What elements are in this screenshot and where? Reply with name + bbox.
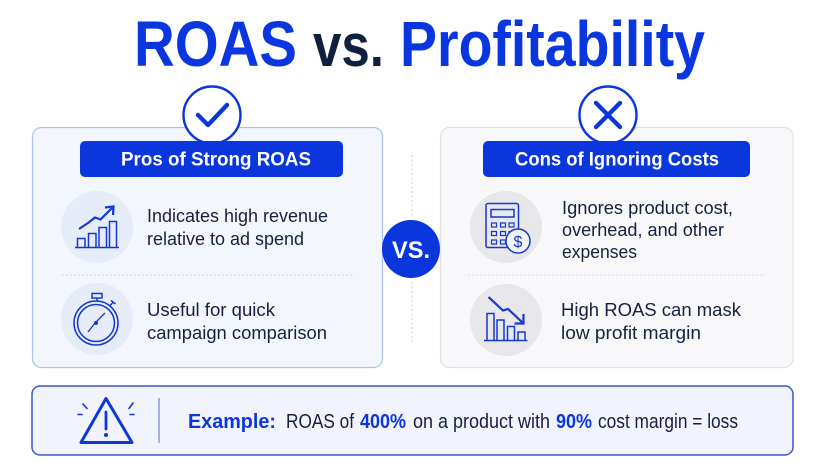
title: vs.	[313, 12, 384, 79]
panel: pros of strong ROAS	[32, 86, 382, 368]
example text: on a product with	[413, 411, 550, 433]
pros heading: Pros of Strong ROAS	[121, 148, 311, 170]
text: ignored expenses: Ignores product cost,	[562, 197, 733, 218]
icon: calculator with coin	[470, 191, 542, 263]
example text: ROAS of	[286, 411, 354, 433]
example text: cost margin = loss	[598, 411, 738, 433]
example text: 400%	[360, 411, 406, 433]
icon: stopwatch	[61, 283, 133, 355]
vs badge: VS.	[392, 237, 430, 264]
text: profit margin	[561, 299, 742, 343]
text: profit margin: low profit margin	[561, 322, 701, 343]
title	[134, 8, 705, 80]
icon: calculator with coin: $	[514, 234, 523, 251]
icon: rising bar chart	[61, 191, 133, 263]
panel: example callout	[32, 386, 793, 455]
icon: cross badge	[580, 86, 636, 144]
text: ignored expenses: expenses	[562, 241, 637, 262]
example text	[188, 411, 738, 433]
text: comparison	[147, 299, 327, 343]
text: comparison: campaign comparison	[147, 322, 327, 343]
cons heading: Cons of Ignoring Costs	[515, 148, 719, 170]
vertical dotted separator	[411, 155, 413, 342]
pros heading	[80, 141, 343, 177]
example text: 90%	[556, 411, 592, 433]
icon: check mark badge	[184, 86, 240, 144]
text: revenue: relative to ad spend	[147, 228, 304, 249]
text: ignored expenses: overhead, and other	[562, 219, 724, 240]
example text: Example:	[188, 411, 276, 433]
panel: cons of ignoring costs	[440, 86, 793, 368]
title: ROAS	[134, 8, 297, 80]
text: revenue	[147, 205, 328, 249]
text: comparison: Useful for quick	[147, 299, 276, 320]
text: revenue: Indicates high revenue	[147, 205, 328, 226]
title: Profitability	[400, 8, 705, 80]
icon: warning triangle	[78, 398, 134, 442]
text: ignored expenses	[562, 197, 733, 262]
vs badge	[382, 220, 440, 278]
icon: falling bar chart	[470, 284, 542, 356]
cons heading	[483, 141, 750, 177]
text: profit margin: High ROAS can mask	[561, 299, 742, 320]
